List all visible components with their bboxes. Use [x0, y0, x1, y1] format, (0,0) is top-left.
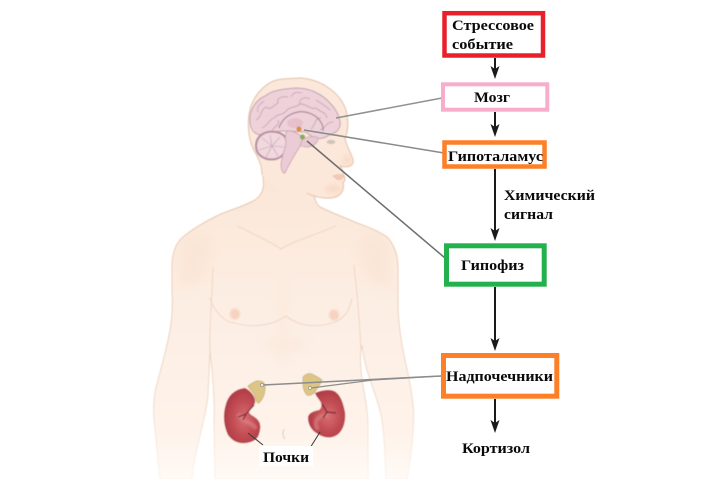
human figure illustration	[154, 78, 414, 479]
box: pituitary: Гипофиз	[461, 258, 524, 274]
thalamus	[287, 118, 303, 128]
cerebellum folds	[259, 135, 284, 157]
arrow 2	[490, 112, 500, 137]
box: pituitary	[446, 246, 544, 284]
kidney pointer lines	[248, 432, 320, 448]
arrow 5	[490, 399, 500, 433]
head	[248, 78, 353, 205]
label: chemical signal	[504, 188, 595, 223]
left kidney	[224, 388, 260, 443]
pointer dots	[260, 383, 312, 390]
label: kidneys	[259, 446, 313, 466]
line: pituitary	[307, 141, 445, 258]
brainstem	[281, 131, 302, 173]
line: left adrenal	[263, 376, 441, 385]
line: hypothalamus	[304, 130, 444, 153]
box: brain	[443, 84, 547, 110]
frontal base	[300, 137, 318, 147]
arrow 3	[490, 169, 500, 241]
line: right adrenal	[311, 376, 441, 388]
eye and lips	[325, 135, 344, 180]
pointer lines	[263, 98, 445, 388]
face shading	[324, 154, 352, 194]
torso and arms	[154, 170, 414, 479]
right adrenal gland	[303, 374, 322, 395]
right kidney	[308, 390, 345, 438]
box: brain: Мозг	[474, 90, 510, 106]
head outline	[248, 78, 353, 198]
torso shading	[178, 235, 392, 370]
nipples	[230, 308, 339, 320]
box: hypothalamus: Гипоталамус	[448, 149, 543, 165]
arrow 1	[490, 58, 500, 79]
cerebellum	[256, 132, 287, 159]
box: adrenals	[444, 356, 557, 396]
box: stress event	[444, 13, 543, 55]
flowchart arrows	[490, 58, 500, 433]
cerebral folds	[256, 92, 333, 131]
box: hypothalamus	[444, 142, 544, 166]
arrow 4	[490, 287, 500, 351]
left adrenal gland	[248, 381, 265, 403]
navel	[283, 429, 285, 439]
label: kidneys: Почки	[263, 450, 309, 466]
line: brain	[336, 98, 442, 118]
pituitary marker	[300, 134, 305, 140]
brain	[250, 88, 340, 173]
label: chemical signal: Химический	[504, 188, 595, 204]
box: stress event: Стрессовое	[452, 18, 534, 34]
label: chemical signal: сигнал	[504, 207, 554, 223]
box: stress event: событие	[452, 37, 513, 53]
hypothalamus marker	[296, 126, 302, 132]
cerebrum	[250, 88, 340, 138]
label: cortisol: Кортизол	[462, 441, 531, 457]
chest and arm contour lines	[209, 226, 361, 350]
box: adrenals: Надпочечники	[446, 369, 553, 385]
